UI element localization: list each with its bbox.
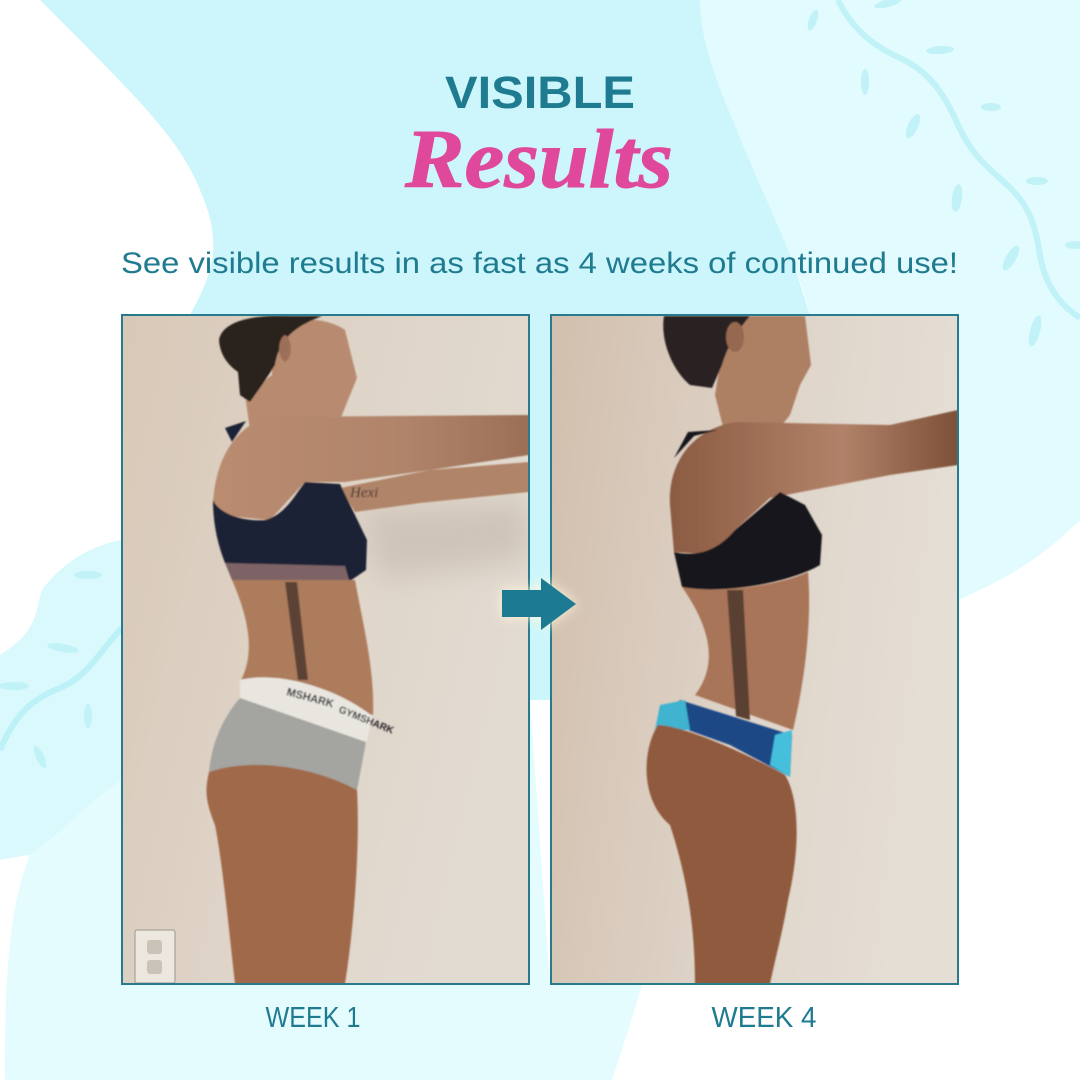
figure: week 4 (647, 316, 958, 984)
wall outlet (135, 930, 175, 983)
tattoo: Hexi: Hexi (349, 485, 378, 501)
panel: week 4 photo (551, 315, 958, 984)
title: VISIBLE: VISIBLE (445, 67, 635, 118)
title: Results: Results (404, 113, 673, 206)
subtitle: See visible results in as fast as 4 weeks of continued use! (121, 247, 958, 280)
label: week 1: WEEK 1 (266, 1002, 360, 1034)
vine: left (0, 628, 122, 750)
vine: top right (838, 0, 1080, 318)
panel: week 1 photo (122, 315, 529, 984)
label: week 4: WEEK 4 (712, 1002, 816, 1034)
waistband text: MSHARK (285, 686, 335, 710)
figure: week 1 (207, 316, 529, 984)
waistband text: brand: GYMSHARK (337, 705, 396, 737)
panel borders (122, 315, 958, 984)
arrow (502, 578, 576, 630)
